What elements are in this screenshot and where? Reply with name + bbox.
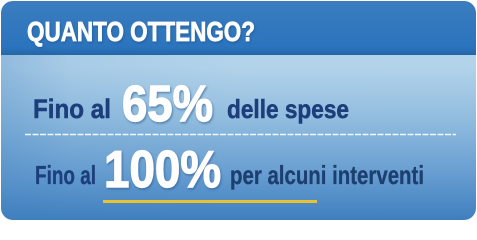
label: Fino al: Fino al <box>35 160 96 190</box>
second line: up to 100% for some works <box>35 141 424 199</box>
dashed divider <box>25 134 456 136</box>
label: per alcuni interventi: per alcuni interventi <box>230 160 424 190</box>
label: delle spese: delle spese <box>227 94 349 124</box>
figure: 100%: 100% <box>104 141 221 199</box>
first line: up to 65% of expenses <box>33 75 349 132</box>
header band <box>1 1 476 55</box>
yellow underline <box>103 200 317 203</box>
figure: 65%: 65% <box>122 75 213 132</box>
title: QUANTO OTTENGO? <box>27 16 255 47</box>
label: Fino al: Fino al <box>33 94 111 124</box>
